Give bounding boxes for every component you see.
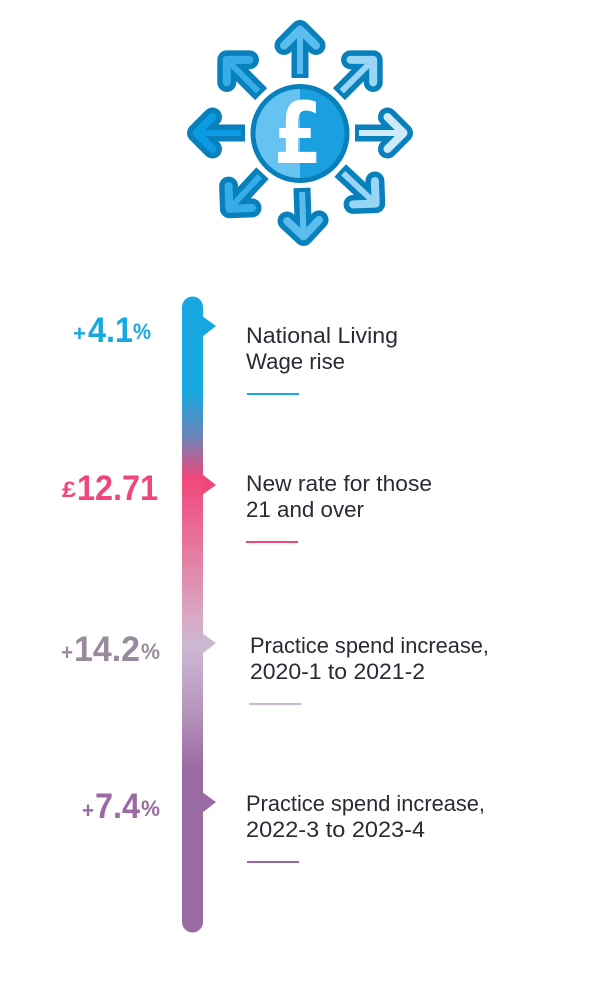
label: practice spend increase 2022-3 to 2023-4 — [246, 791, 485, 863]
stat: +4.1%: 4.1 — [88, 311, 133, 350]
icon: arrow up — [284, 30, 316, 78]
stat: +14.2%: % — [141, 639, 160, 664]
stat: +14.2%: + — [61, 640, 73, 665]
stat: +14.2% — [61, 630, 160, 669]
stat: +7.4%: 7.4 — [95, 787, 140, 826]
icon: pound coin — [253, 84, 347, 184]
label: practice spend increase 2020-1 to 2021-2 — [249, 633, 489, 705]
icon: arrow up-right — [328, 49, 384, 105]
icon: arrow down-right — [329, 159, 387, 215]
label: practice spend increase 2020-1 to 2021-2: 2020-1 to 2021-2 — [250, 659, 425, 684]
pointer: practice spend 2021-2 — [202, 633, 216, 654]
label: practice spend increase 2020-1 to 2021-2: Practice spend increase, — [250, 633, 489, 658]
label: practice spend increase 2022-3 to 2023-4: 2022-3 to 2023-4 — [246, 817, 425, 842]
icon: arrow left — [196, 117, 245, 149]
pointer: new rate — [202, 474, 216, 495]
icon: arrow right — [355, 117, 404, 149]
label: National Living Wage rise: National Living — [246, 323, 398, 348]
stat: +4.1%: % — [133, 319, 151, 344]
stat: +14.2%: 14.2 — [74, 630, 140, 669]
label: National Living Wage rise — [246, 323, 398, 395]
label: practice spend increase 2022-3 to 2023-4: Practice spend increase, — [246, 791, 485, 816]
stat: +7.4% — [82, 787, 160, 826]
icon: arrow up-left — [216, 49, 272, 105]
label: National Living Wage rise: Wage rise — [246, 349, 345, 374]
label: new rate for those 21 and over: New rate for those — [246, 471, 432, 496]
icon: pound coin: £ — [274, 84, 322, 184]
pointer: practice spend 2023-4 — [202, 792, 216, 813]
stat: +7.4%: + — [82, 798, 94, 823]
timeline bar with pointers — [182, 296, 216, 932]
pointer: National Living Wage — [202, 316, 216, 337]
stat: £12.71: £ — [62, 477, 77, 502]
icon: arrow down — [286, 187, 320, 237]
stat: +4.1%: + — [73, 321, 86, 346]
label: new rate for those 21 and over: 21 and over — [246, 497, 364, 522]
stat: +4.1% — [73, 311, 151, 350]
label: new rate for those 21 and over — [246, 471, 432, 543]
icon: arrow down-left — [218, 162, 274, 220]
icon: pound coin with arrows radiating outward — [196, 30, 404, 237]
stat: £12.71: 12.71 — [77, 469, 158, 508]
stat: +7.4%: % — [141, 796, 160, 821]
